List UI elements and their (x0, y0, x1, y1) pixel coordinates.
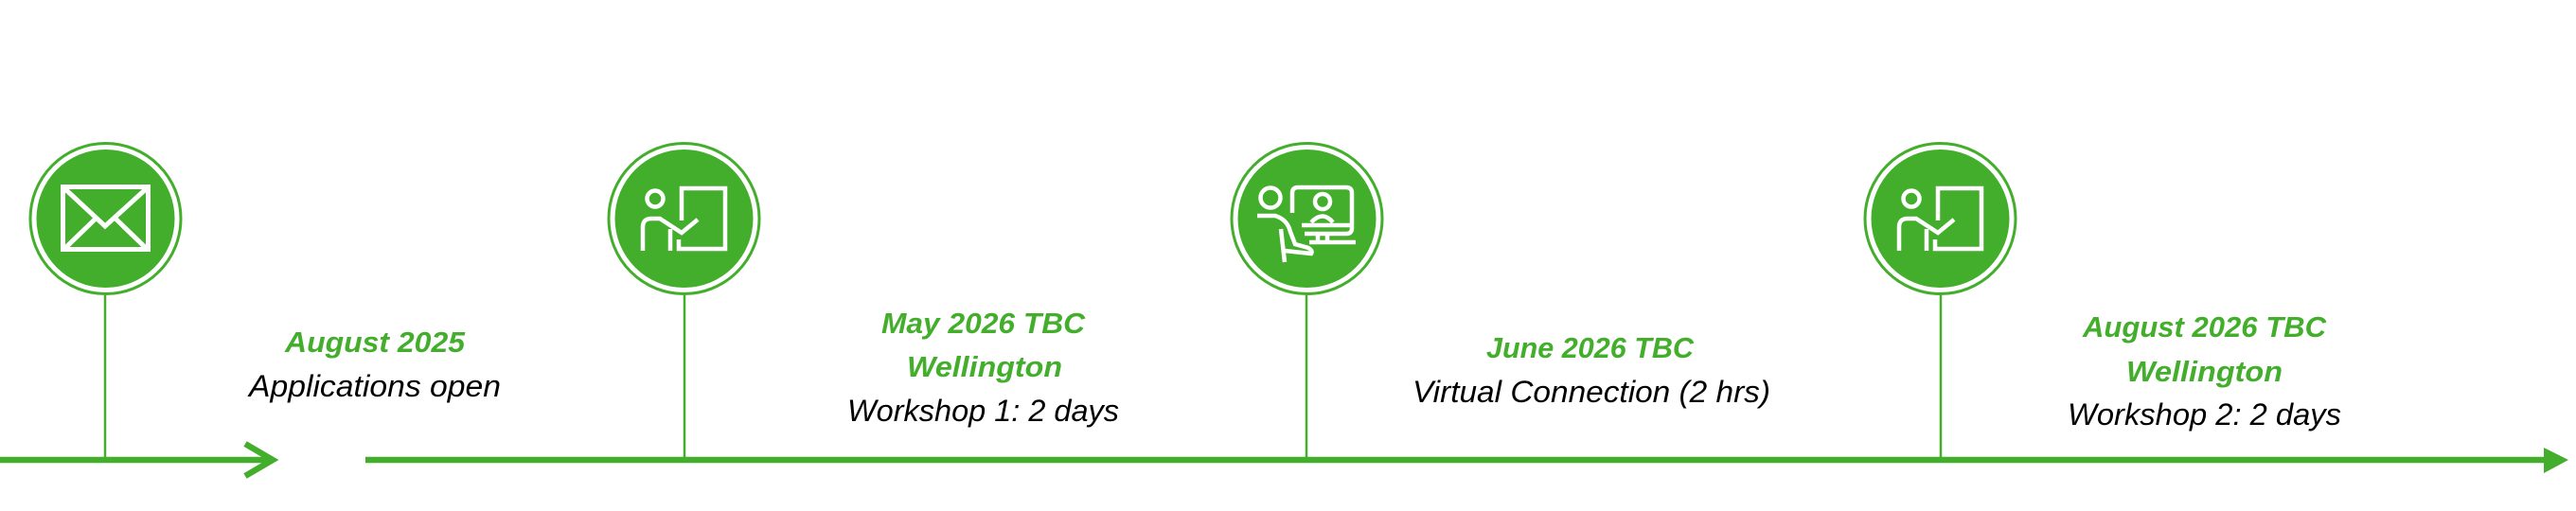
text: August 2025: Applications open (247, 369, 501, 403)
arrow: main timeline segment (365, 448, 2568, 473)
text: August 2026: Wellington (2126, 355, 2283, 388)
text: June 2026: Virtual Connection (2 hrs) (1412, 375, 1770, 409)
milestone: workshop 2 (1865, 144, 2016, 458)
icon: presenter at board (1865, 144, 2016, 293)
text: August 2025 (247, 326, 501, 403)
icon: envelope (30, 144, 181, 293)
text: August 2026: Workshop 2: 2 days (2068, 397, 2341, 432)
text: August 2026: August 2026 TBC (2082, 310, 2327, 344)
milestone: virtual connection (1232, 144, 1382, 458)
icon: person at video call (1232, 144, 1382, 293)
icon: presenter at board (609, 144, 759, 293)
text: May 2026: May 2026 TBC (881, 307, 1086, 340)
arrow: first timeline segment (0, 444, 273, 476)
text: May 2026 (847, 307, 1119, 428)
text: May 2026: Wellington (907, 350, 1062, 383)
text: August 2025: August 2025 (284, 326, 466, 359)
text: August 2026 (2068, 310, 2341, 432)
text: May 2026: Workshop 1: 2 days (847, 394, 1119, 428)
milestone: workshop 1 (609, 144, 759, 458)
text: June 2026: June 2026 TBC (1486, 331, 1695, 364)
milestone: applications open (30, 144, 181, 458)
text: June 2026 (1412, 331, 1770, 409)
